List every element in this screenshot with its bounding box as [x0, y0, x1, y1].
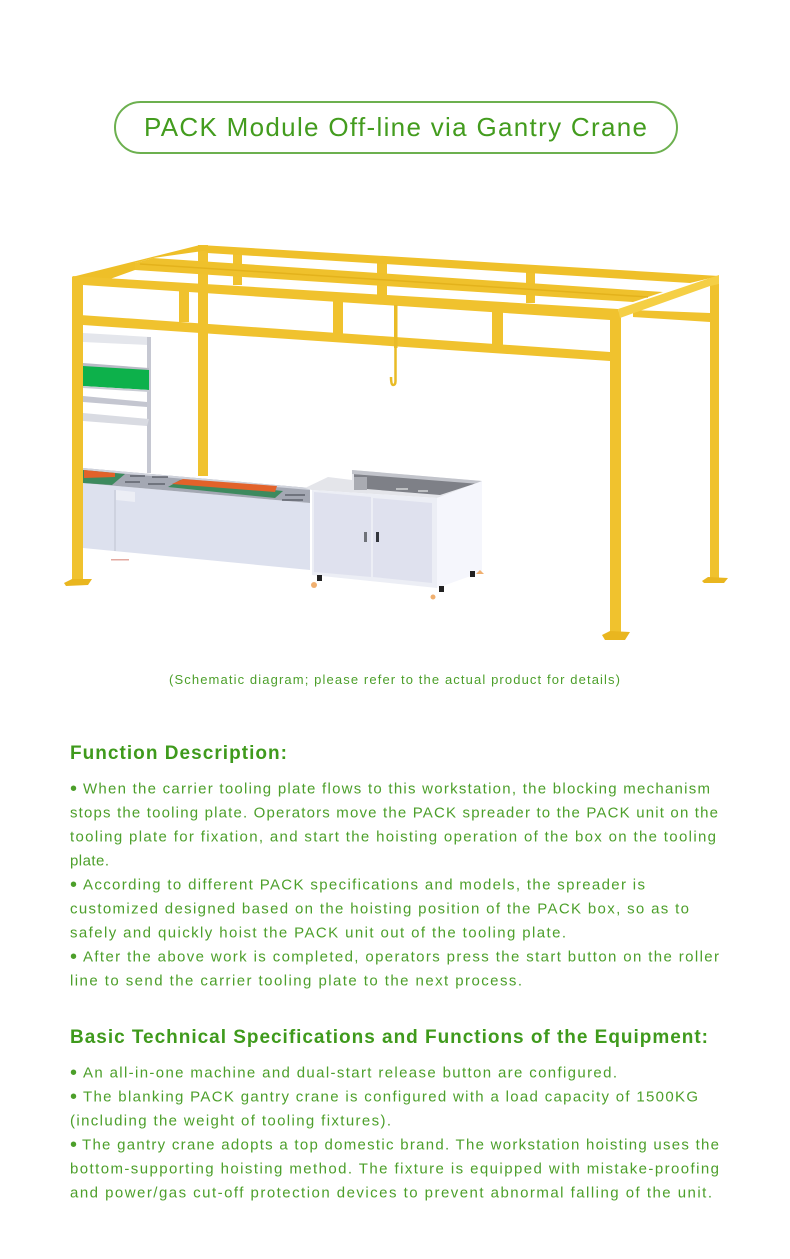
- text block: technical specifications: bottom-supporting hoisting method. The fixture is equipped with mistake-proofing: [70, 1160, 719, 1178]
- text block: technical specifications: and power/gas cut-off protection devices to prevent abnormal falling of the unit.: [70, 1184, 712, 1202]
- text block: technical specifications: The blanking PACK gantry crane is configured with a load capacity of 1500KG: [83, 1088, 698, 1106]
- heading: technical specifications: Basic Technical Specifications and Functions of the Equipment:: [70, 1027, 708, 1048]
- text block: technical specifications: •: [70, 1062, 77, 1084]
- text block: function description: According to different PACK specifications and models, the spreader is: [83, 876, 645, 894]
- text block: function description: plate.: [70, 852, 109, 870]
- title pill: PACK Module Off-line via Gantry Crane: [144, 112, 647, 142]
- heading: function description: Function Description:: [70, 743, 287, 764]
- hook: [391, 305, 398, 385]
- text block: function description: customized designed based on the hoisting position of the PACK box, so as to: [70, 900, 689, 918]
- text block: function description: stops the tooling plate. Operators move the PACK spreader to the PACK unit on the: [70, 804, 718, 822]
- text block: function description: •: [70, 946, 77, 968]
- text block: function description: line to send the carrier tooling plate to the next process.: [70, 972, 522, 990]
- text block: technical specifications: •: [70, 1086, 77, 1108]
- text block: function description: [70, 778, 719, 990]
- conveyor line: [83, 468, 310, 570]
- caption: (Schematic diagram; please refer to the actual product for details): [169, 672, 620, 687]
- diagram: gantry crane and workstation: [64, 245, 728, 640]
- text block: function description: When the carrier tooling plate flows to this workstation, the blocking mechanism: [83, 780, 710, 798]
- cabinet: [305, 470, 484, 600]
- text block: function description: safely and quickly hoist the PACK unit out of the tooling plate.: [70, 924, 566, 942]
- text block: function description: tooling plate for fixation, and start the hoisting operation of the box on the tooling: [70, 828, 716, 846]
- yellow gantry frame: [64, 245, 728, 640]
- text block: technical specifications: •: [70, 1134, 77, 1156]
- text block: technical specifications: An all-in-one machine and dual-start release button are configured.: [83, 1064, 617, 1082]
- text block: technical specifications: (including the weight of tooling fixtures).: [70, 1112, 391, 1130]
- text block: function description: •: [70, 874, 77, 896]
- shelf rack: [83, 333, 151, 473]
- text block: function description: •: [70, 778, 77, 800]
- text block: technical specifications: [70, 1062, 719, 1202]
- title pill: [115, 102, 677, 153]
- text block: function description: After the above work is completed, operators press the start button on the roller: [83, 948, 719, 966]
- text block: technical specifications: The gantry crane adopts a top domestic brand. The workstation hoisting uses the: [82, 1136, 719, 1154]
